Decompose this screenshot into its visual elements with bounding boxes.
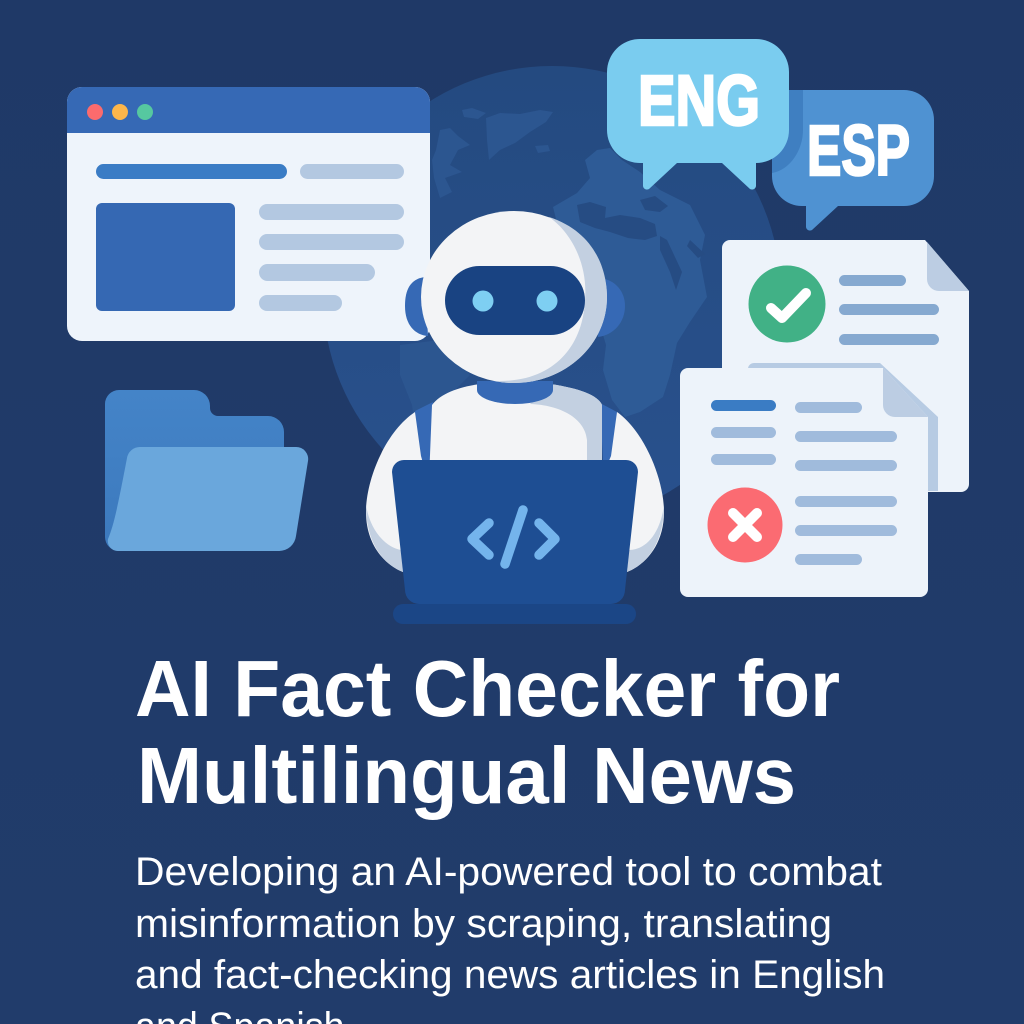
laptop screen (392, 460, 638, 604)
map: mediterranean (577, 196, 705, 290)
ENG label: ENG (638, 62, 760, 141)
speech bubble: ESP (772, 90, 934, 231)
title: Multilingual News (137, 731, 796, 820)
map: north america (432, 128, 470, 198)
robot head (421, 211, 607, 383)
description (135, 850, 885, 1024)
description: misinformation by scraping, translating (135, 902, 832, 946)
verified text lines (839, 275, 939, 345)
icon: robot with laptop (366, 211, 664, 624)
title (135, 644, 840, 820)
document: rejected (680, 368, 928, 597)
robot ears (405, 277, 625, 337)
map: greenland (462, 108, 553, 160)
map: europe and africa (553, 148, 707, 417)
ESP label: ESP (807, 112, 910, 191)
description: and fact-checking news articles in English (135, 953, 885, 997)
robot visor (445, 266, 585, 335)
map: south america (400, 340, 470, 450)
robot torso (429, 384, 602, 480)
icon: folder (105, 390, 308, 551)
icon: red cross (708, 488, 782, 562)
robot eyes (472, 290, 558, 312)
panel: browser window (67, 87, 430, 341)
robot neck (477, 381, 553, 404)
icon: code symbol (472, 510, 555, 564)
robot straps (415, 402, 617, 480)
robot arms (366, 412, 664, 572)
document: verified (722, 240, 969, 492)
icon: green check (748, 266, 826, 342)
rejected text lines (711, 400, 897, 565)
description: Developing an AI-powered tool to combat (135, 850, 882, 894)
laptop base (393, 604, 636, 624)
speech bubble: ENG (607, 39, 789, 190)
globe (323, 66, 781, 524)
title: AI Fact Checker for (135, 644, 840, 733)
